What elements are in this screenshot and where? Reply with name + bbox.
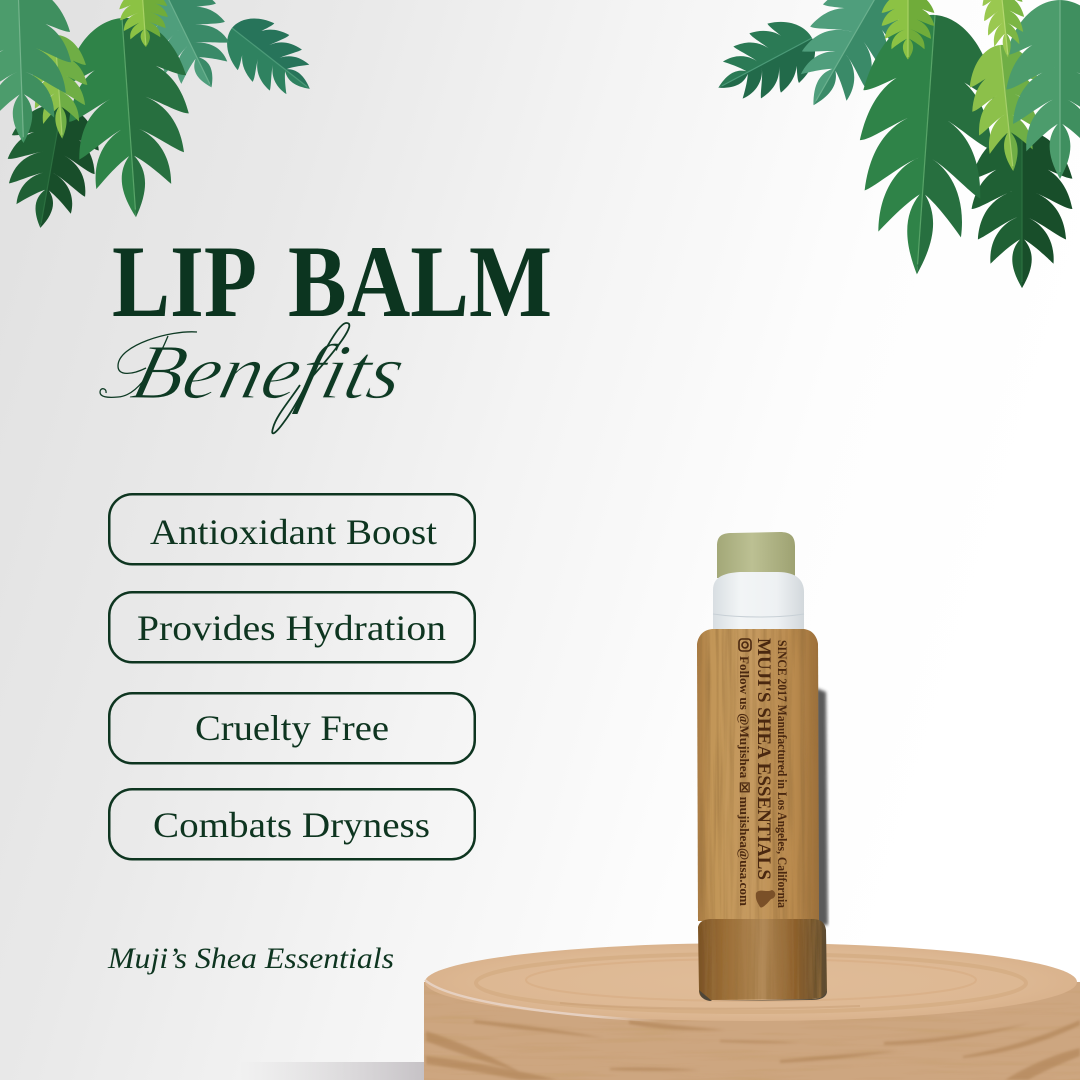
bamboo body: [697, 629, 819, 921]
subtitle: Benefits: Benefits: [124, 329, 413, 416]
bamboo cap: [698, 919, 827, 1000]
white inner tube: [713, 572, 804, 632]
pill: Provides Hydration: [109, 592, 475, 662]
engraving: brand: MUJI'S SHEA ESSENTIALS: [753, 638, 774, 880]
lip balm stick: [697, 532, 828, 1001]
title: LIP BALM: [112, 225, 552, 339]
floor shadow: [240, 1062, 430, 1080]
icon: africa shape: [756, 890, 775, 907]
pill: Combats Dryness: [109, 789, 475, 859]
brand name: Muji’s Shea Essentials: [107, 942, 394, 975]
pill: Provides Hydration: Provides Hydration: [137, 608, 446, 648]
stick shadow: [816, 688, 828, 925]
title: LIP BALM: BALM: [288, 225, 552, 339]
pill: Antioxidant Boost: [109, 494, 475, 564]
pill: Cruelty Free: Cruelty Free: [195, 708, 389, 748]
engraving: Since 2017: SINCE 2017 Manufactured in Los Angeles, California: [775, 640, 789, 909]
wooden pedestal: [424, 943, 1080, 1080]
leaves: top right cluster: [703, 0, 1080, 288]
icon: instagram: [739, 639, 751, 651]
leaves: top left cluster: [0, 0, 328, 236]
subtitle: Benefits: [100, 323, 413, 433]
engraving: contact: Follow us @Mujishea ☒ mujishea@usa.com: [737, 656, 752, 906]
title: LIP BALM: LIP: [112, 225, 257, 339]
pill: Antioxidant Boost: Antioxidant Boost: [150, 512, 437, 552]
balm tip: [717, 532, 795, 580]
pill: Combats Dryness: Combats Dryness: [153, 805, 430, 845]
pill: Cruelty Free: [109, 693, 475, 763]
